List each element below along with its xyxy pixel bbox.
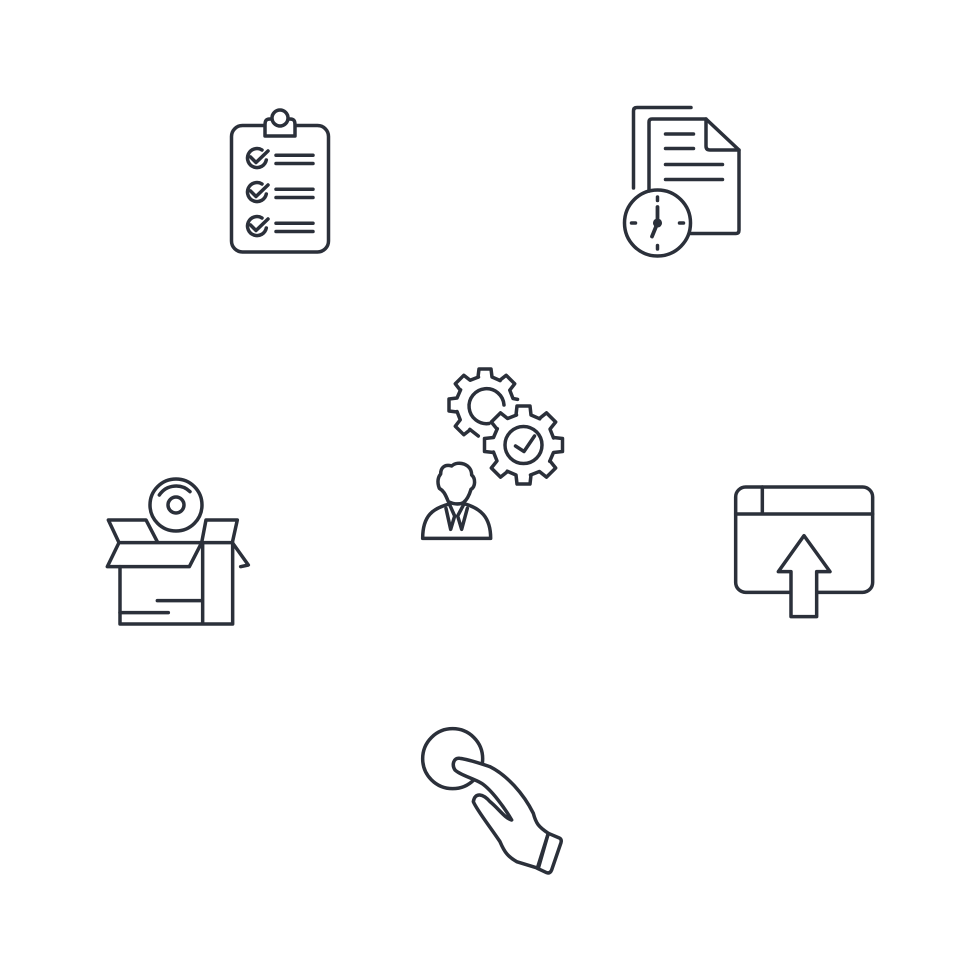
folded corner <box>706 119 739 150</box>
clock <box>624 190 690 256</box>
hand <box>453 758 548 868</box>
businessman <box>423 463 491 538</box>
coin <box>423 729 483 789</box>
disc <box>150 479 202 531</box>
document text lines <box>666 134 722 180</box>
clipboard clip <box>265 110 295 136</box>
clipboard board <box>232 126 328 252</box>
browser title bar <box>736 487 873 514</box>
browser window <box>736 487 873 592</box>
upper gear <box>449 369 524 436</box>
front document <box>649 119 739 234</box>
cuff <box>537 833 561 873</box>
icon: browser window upload <box>736 487 873 617</box>
checklist row 1 <box>247 149 313 168</box>
checklist row 2 <box>247 183 313 202</box>
icon: documents with clock <box>624 108 739 256</box>
box detail lines <box>120 601 202 613</box>
front flap <box>107 543 232 567</box>
back sheet <box>634 108 691 188</box>
box body <box>120 543 233 624</box>
icon: hand holding coin <box>423 729 561 873</box>
back flaps <box>108 520 237 543</box>
lower gear with check <box>484 406 563 484</box>
icon: person with gears <box>423 369 563 538</box>
icon: clipboard checklist <box>232 110 328 252</box>
right side flap <box>233 544 248 567</box>
checklist row 3 <box>247 217 313 236</box>
icon: open box with disc <box>107 479 248 624</box>
upload arrow <box>778 536 830 617</box>
